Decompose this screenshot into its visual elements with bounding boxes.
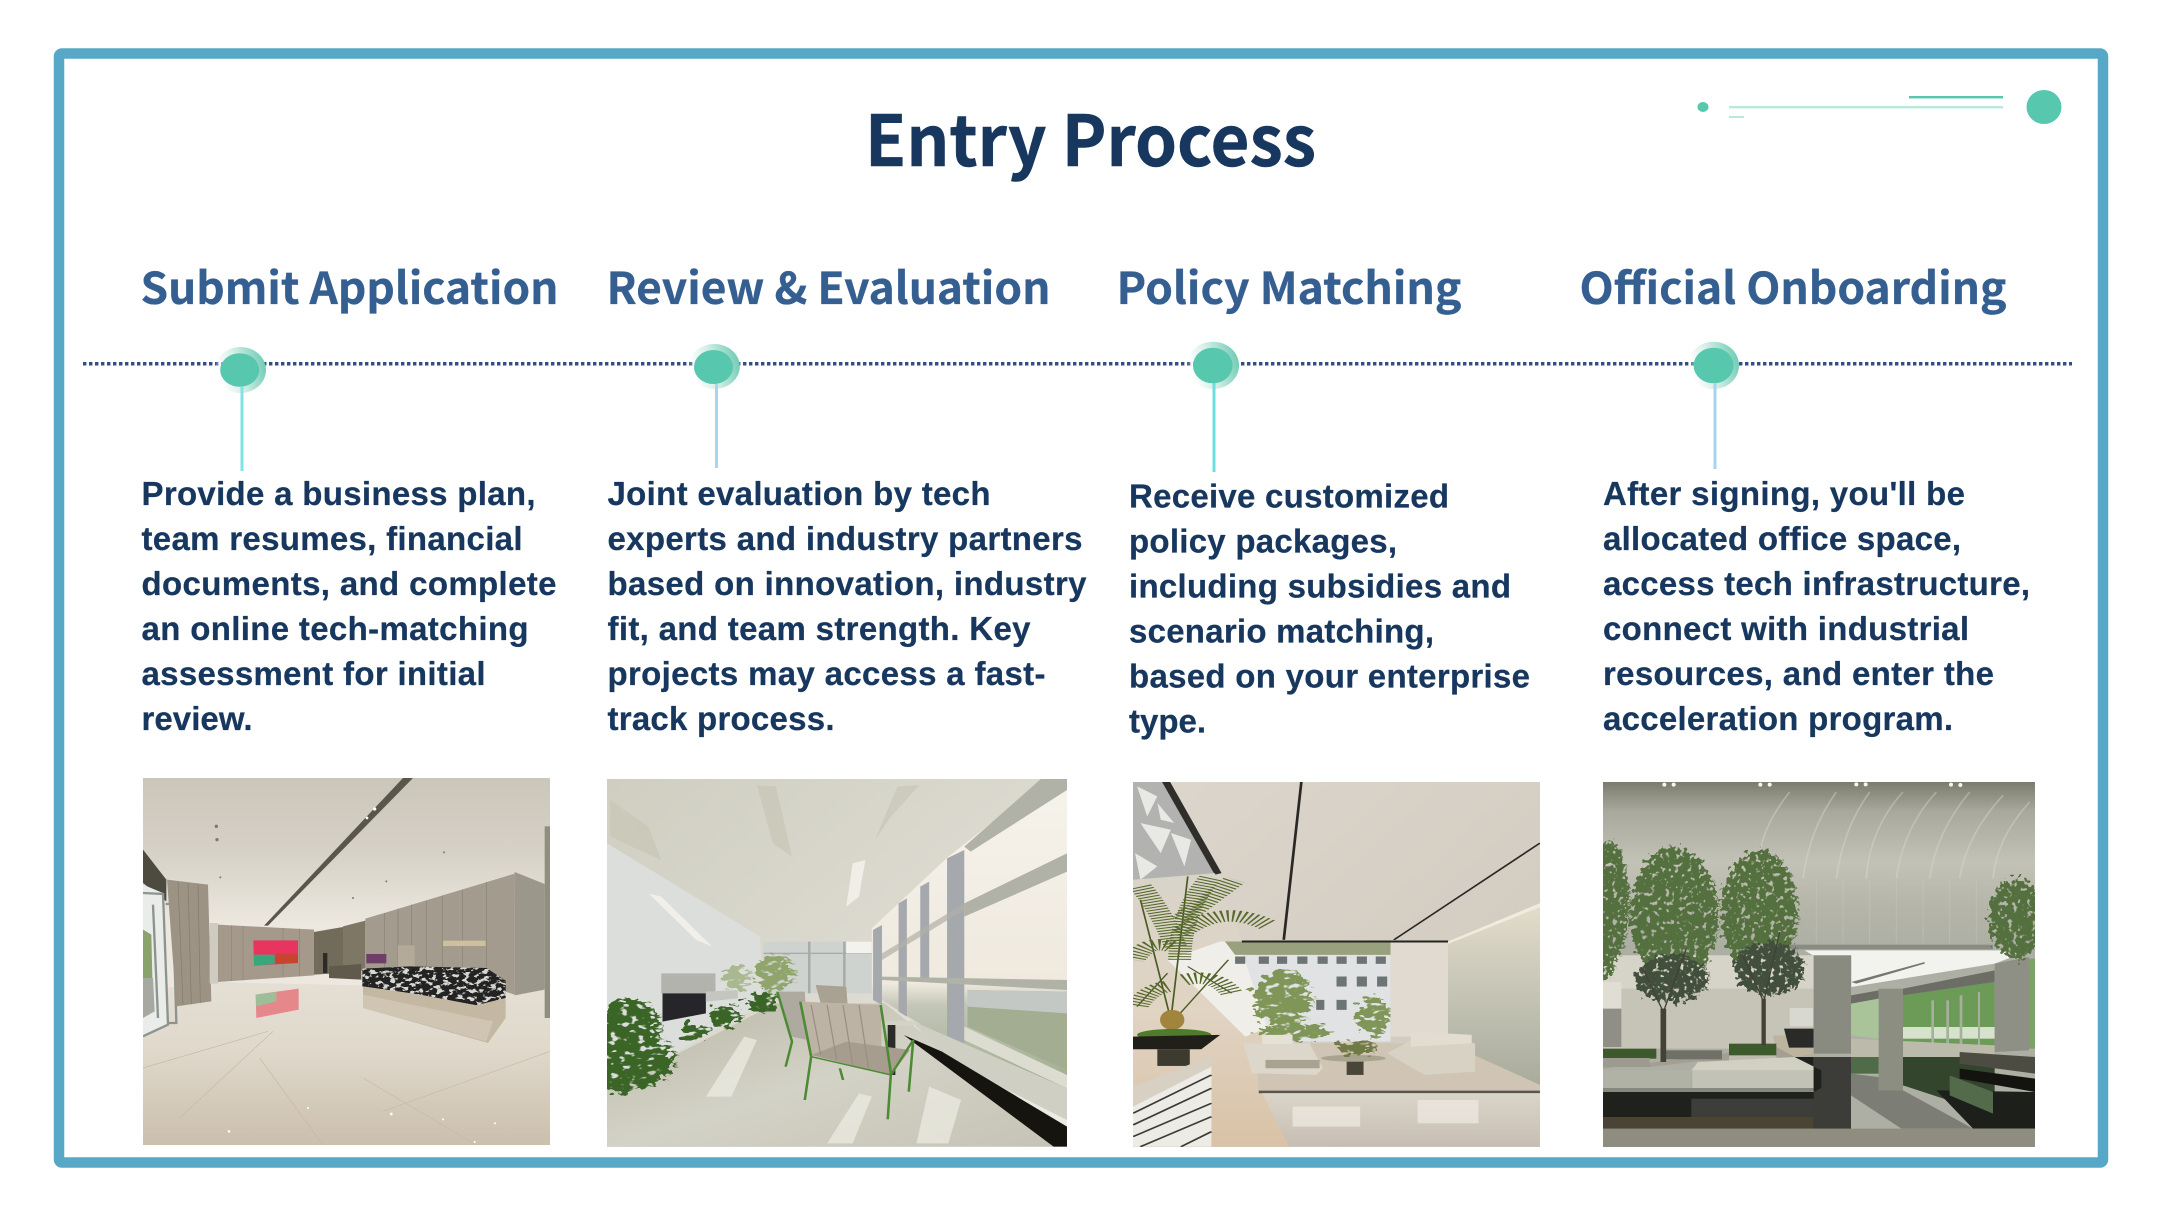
description 2: track process. — [608, 700, 834, 737]
timeline node 2 — [689, 344, 740, 389]
heading: official onboarding: Official Onboarding — [1580, 253, 2006, 317]
description 3: policy packages, — [1129, 522, 1397, 560]
connector 4 — [1714, 383, 1716, 469]
photo: lobby with reception desk — [143, 778, 550, 1145]
description 2 — [608, 475, 1087, 737]
description 2: projects may access a fast- — [608, 655, 1046, 692]
description 1: Provide a business plan, — [142, 475, 536, 512]
connector 3 — [1212, 383, 1216, 472]
description 2: Joint evaluation by tech — [608, 475, 990, 512]
description 4: acceleration program. — [1603, 700, 1953, 737]
description 3: based on your enterprise — [1129, 658, 1530, 694]
description 2: experts and industry partners — [608, 520, 1082, 557]
description 1: review. — [142, 700, 252, 737]
description 1 — [142, 475, 556, 737]
decoration: top-right dots and lines — [1698, 90, 2062, 124]
description 4 — [1603, 475, 2030, 737]
timeline node 4 — [1688, 342, 1739, 389]
panel: step 1 submit application — [140, 253, 558, 1145]
timeline node 3 — [1187, 342, 1239, 389]
connector 1 — [240, 387, 244, 471]
description 3: Receive customized — [1129, 478, 1449, 514]
connector 2 — [715, 384, 718, 468]
timeline node 1 — [215, 347, 266, 393]
heading: policy matching: Policy Matching — [1116, 253, 1462, 317]
description 3: scenario matching, — [1129, 612, 1434, 650]
description 4: After signing, you'll be — [1603, 475, 1965, 512]
description 4: access tech infrastructure, — [1603, 565, 2030, 602]
description 3: type. — [1129, 702, 1206, 740]
heading: submit application: Submit Application — [140, 253, 558, 317]
description 4: allocated office space, — [1603, 520, 1961, 557]
title: Entry Process — [865, 86, 1316, 187]
description 1: documents, and complete — [142, 565, 556, 602]
description 4: connect with industrial — [1603, 610, 1969, 647]
description 1: an online tech-matching — [142, 610, 528, 647]
photo: atrium with indoor trees and water — [1603, 782, 2035, 1147]
description 1: assessment for initial — [142, 655, 486, 692]
photo: sunlit terrace with chairs — [607, 779, 1067, 1147]
description 3: including subsidies and — [1129, 568, 1511, 604]
description 2: based on innovation, industry — [608, 565, 1087, 602]
timeline dotted line — [83, 362, 2072, 365]
photo: lounge with sofas and plant — [1133, 782, 1540, 1147]
description 2: fit, and team strength. Key — [608, 610, 1031, 647]
description 4: resources, and enter the — [1603, 655, 1994, 692]
heading: review and evaluation: Review & Evaluation — [606, 253, 1050, 317]
description 1: team resumes, financial — [142, 520, 522, 557]
panel: step 2 review and evaluation — [597, 253, 1087, 1147]
panel: step 4 official onboarding — [1580, 253, 2043, 1147]
panel: step 3 policy matching — [1116, 253, 1540, 1147]
description 3 — [1129, 478, 1530, 740]
